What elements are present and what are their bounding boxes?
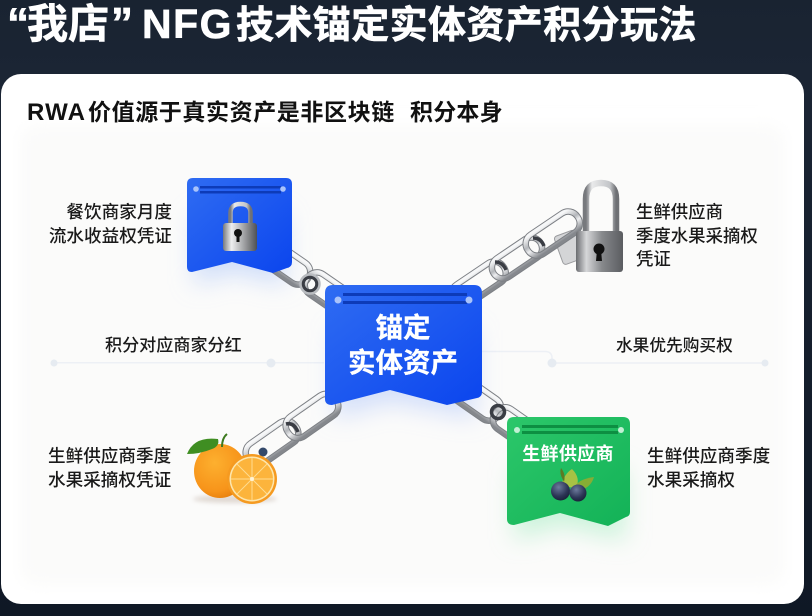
- text: bottom left label: 水果采摘权凭证: [48, 470, 171, 490]
- subtitle: 价值源于真实资产是非区块链: [88, 99, 395, 125]
- chain: bottom left: [241, 390, 343, 469]
- text: mid right label: 水果优先购买权: [616, 336, 733, 355]
- text: top right label: 凭证: [636, 249, 671, 269]
- text: bottom right label: 水果采摘权: [647, 470, 735, 490]
- connector: left dotted line: [50, 358, 324, 368]
- chain: bottom right: [443, 371, 551, 457]
- subtitle: 积分本身: [410, 99, 503, 125]
- title: ”: [111, 0, 133, 48]
- center label: 锚定: [376, 312, 430, 343]
- title: “: [7, 0, 29, 48]
- flag: top left blue: [187, 178, 292, 273]
- icon: large padlock: [576, 183, 623, 272]
- text: top left label: 餐饮商家月度: [66, 202, 172, 222]
- title: NFG: [142, 1, 233, 47]
- text: top right label: 季度水果采摘权: [636, 226, 758, 246]
- text: bottom right label: 生鲜供应商季度: [647, 446, 770, 466]
- text: bottom left label: 生鲜供应商季度: [48, 446, 171, 466]
- glow: flag shadows: [195, 215, 625, 540]
- title: 技术锚定实体资产积分玩法: [236, 5, 697, 47]
- center label: 实体资产: [348, 347, 458, 378]
- chain: top right: [447, 207, 585, 310]
- flag: center anchor: [325, 285, 482, 405]
- text: top left label: 流水收益权凭证: [49, 226, 172, 246]
- green label: 生鲜供应商: [522, 443, 614, 464]
- icon: orange with slice: [187, 434, 277, 504]
- icon: small padlock: [223, 204, 257, 251]
- flag: green supplier: [507, 417, 630, 526]
- icon: blueberries: [551, 468, 594, 502]
- title: 我店: [27, 1, 109, 47]
- connector: right dotted line: [482, 352, 768, 368]
- text: top right label: 生鲜供应商: [636, 202, 723, 222]
- text: mid left label: 积分对应商家分红: [105, 335, 242, 355]
- subtitle: RWA: [27, 99, 86, 126]
- chain: top left: [251, 235, 364, 322]
